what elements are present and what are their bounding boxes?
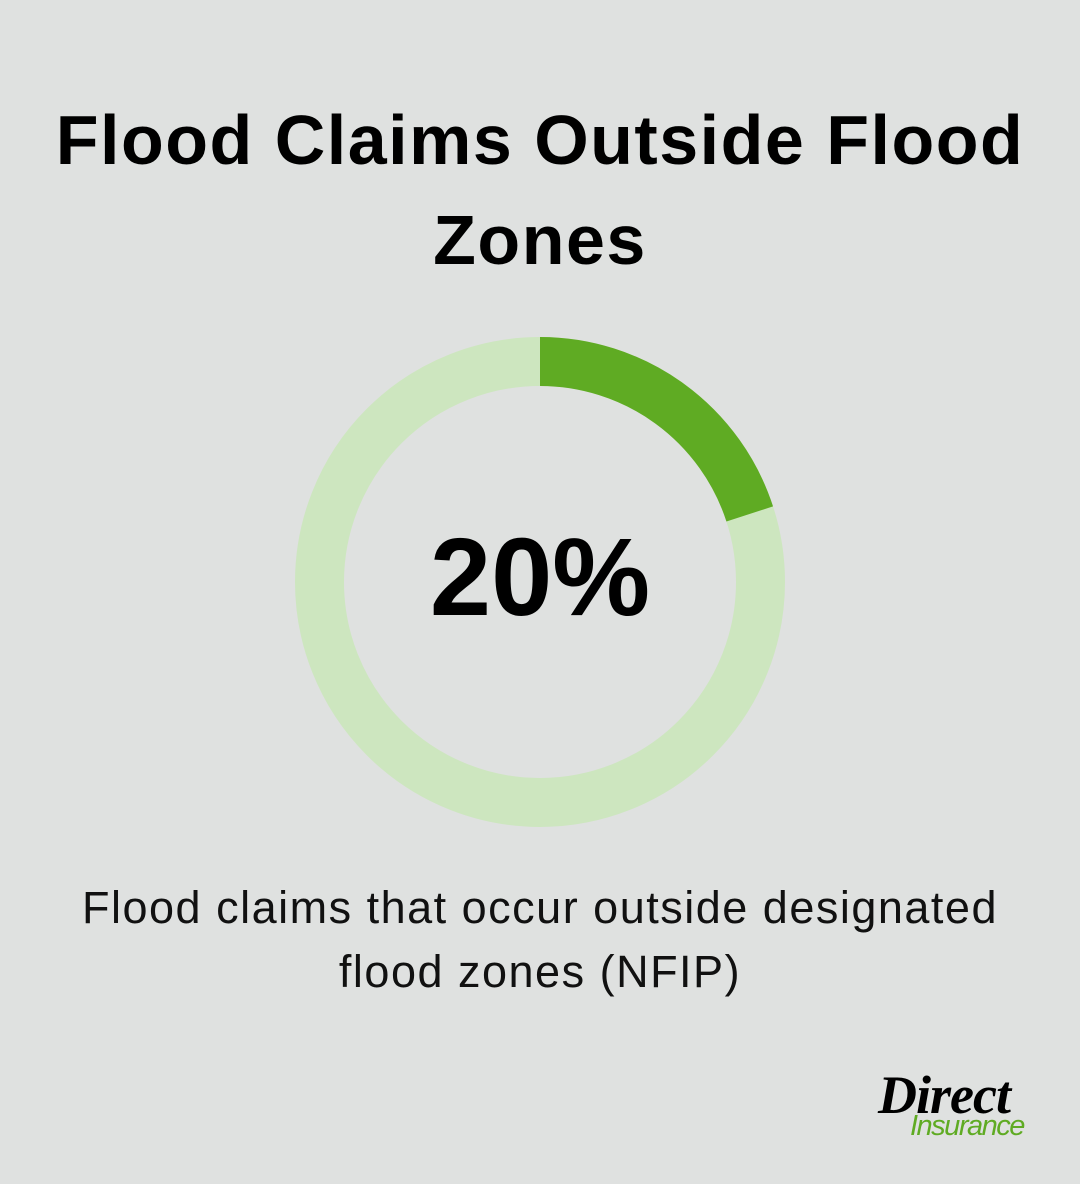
logo bbox=[878, 1065, 1024, 1142]
description bbox=[82, 882, 998, 997]
title: Zones bbox=[433, 201, 647, 279]
description: Flood claims that occur outside designated bbox=[82, 882, 998, 933]
description: flood zones (NFIP) bbox=[339, 946, 741, 997]
title: Flood Claims Outside Flood bbox=[56, 101, 1024, 179]
logo: Direct bbox=[878, 1065, 1010, 1125]
percentage value: 20% bbox=[430, 516, 650, 639]
logo: Insurance bbox=[910, 1110, 1024, 1142]
title bbox=[56, 101, 1024, 279]
